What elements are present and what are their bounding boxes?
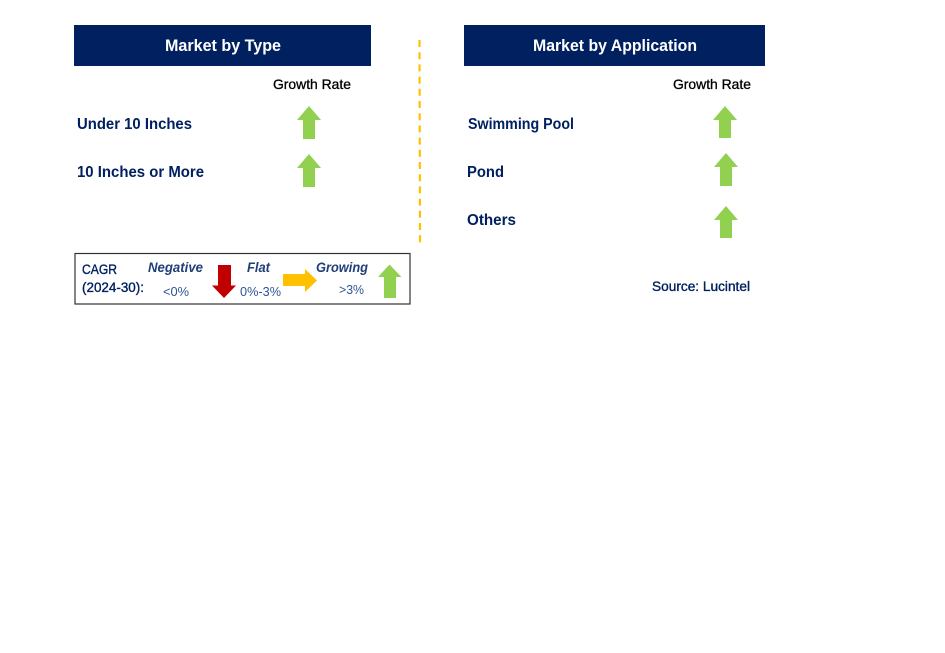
icon: yellow right arrow bbox=[283, 269, 317, 292]
legend title: CAGR bbox=[82, 262, 117, 277]
legend: flat bbox=[240, 260, 281, 299]
legend title bbox=[82, 262, 144, 295]
heading: market by application: Market by Application bbox=[533, 36, 697, 55]
legend: negative: <0% bbox=[163, 285, 189, 299]
source note: Source: Lucintel bbox=[652, 279, 750, 294]
legend: negative: Negative bbox=[148, 260, 203, 275]
heading: market by type bbox=[74, 25, 371, 66]
icon: green up arrow bbox=[297, 106, 321, 139]
icon: green up arrow bbox=[714, 153, 738, 186]
icon: green up arrow bbox=[713, 106, 737, 138]
icon: green up arrow bbox=[714, 206, 738, 238]
column heading: growth rate: Growth Rate bbox=[673, 76, 751, 92]
legend title: (2024-30): bbox=[82, 280, 144, 295]
legend: growing: Growing bbox=[316, 260, 369, 275]
row label: under 10 inches: Under 10 Inches bbox=[77, 116, 192, 133]
column heading: growth rate: Growth Rate bbox=[273, 76, 351, 92]
icon: red down arrow bbox=[212, 265, 236, 298]
legend: growing bbox=[316, 260, 369, 297]
panel: market by application bbox=[464, 25, 765, 294]
legend: growing: >3% bbox=[339, 283, 364, 297]
heading: market by type: Market by Type bbox=[165, 36, 281, 55]
icon: green up arrow bbox=[378, 264, 402, 298]
panel: market by type bbox=[74, 25, 371, 187]
icon: green up arrow bbox=[297, 154, 321, 187]
legend: flat: 0%-3% bbox=[240, 285, 281, 299]
row label: swimming pool: Swimming Pool bbox=[468, 116, 574, 133]
row label: 10 inches or more: 10 Inches or More bbox=[77, 164, 204, 181]
legend: flat: Flat bbox=[247, 260, 270, 275]
legend: negative bbox=[148, 260, 203, 299]
legend: cagr bbox=[75, 254, 410, 304]
row label: pond: Pond bbox=[467, 164, 504, 181]
heading: market by application bbox=[464, 25, 765, 66]
row label: others: Others bbox=[467, 212, 516, 229]
